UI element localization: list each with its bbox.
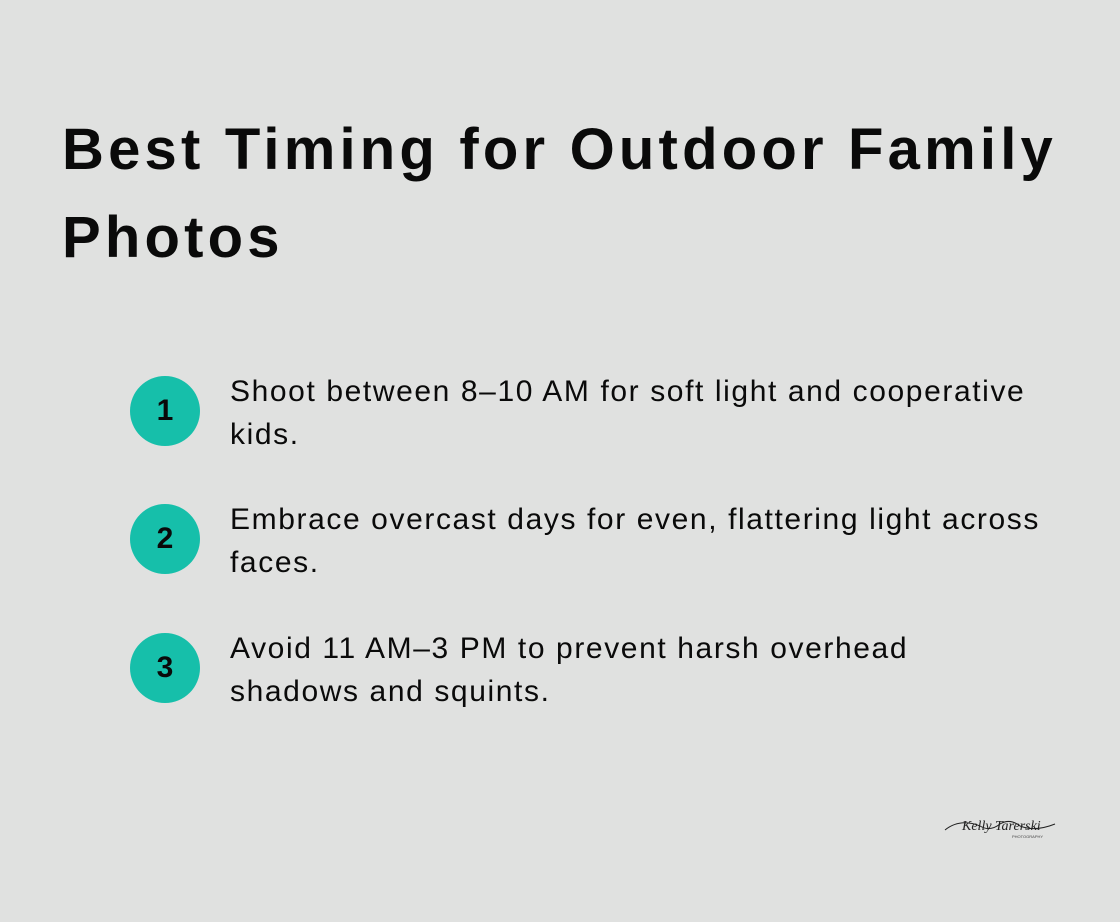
number badge 1: 1: [157, 394, 173, 427]
title: Best Timing for Outdoor Family Photos: [62, 117, 1057, 270]
item 2: [130, 503, 1040, 579]
number badge 3: [130, 633, 200, 703]
logo signature: PHOTOGRAPHY: [1012, 834, 1043, 839]
logo signature: [944, 819, 1056, 839]
item 3: [130, 632, 908, 708]
text 2: Embrace overcast days for even, flattering light across faces.: [230, 503, 1040, 579]
logo signature: Kelly Tarerski: [961, 819, 1041, 834]
item 1: [130, 375, 1025, 451]
number badge 2: [130, 504, 200, 574]
text 1: Shoot between 8–10 AM for soft light and cooperative kids.: [230, 375, 1025, 451]
number badge 2: 2: [157, 522, 173, 555]
text 3: Avoid 11 AM–3 PM to prevent harsh overhead shadows and squints.: [230, 632, 908, 708]
number badge 1: [130, 376, 200, 446]
number badge 3: 3: [157, 651, 173, 684]
